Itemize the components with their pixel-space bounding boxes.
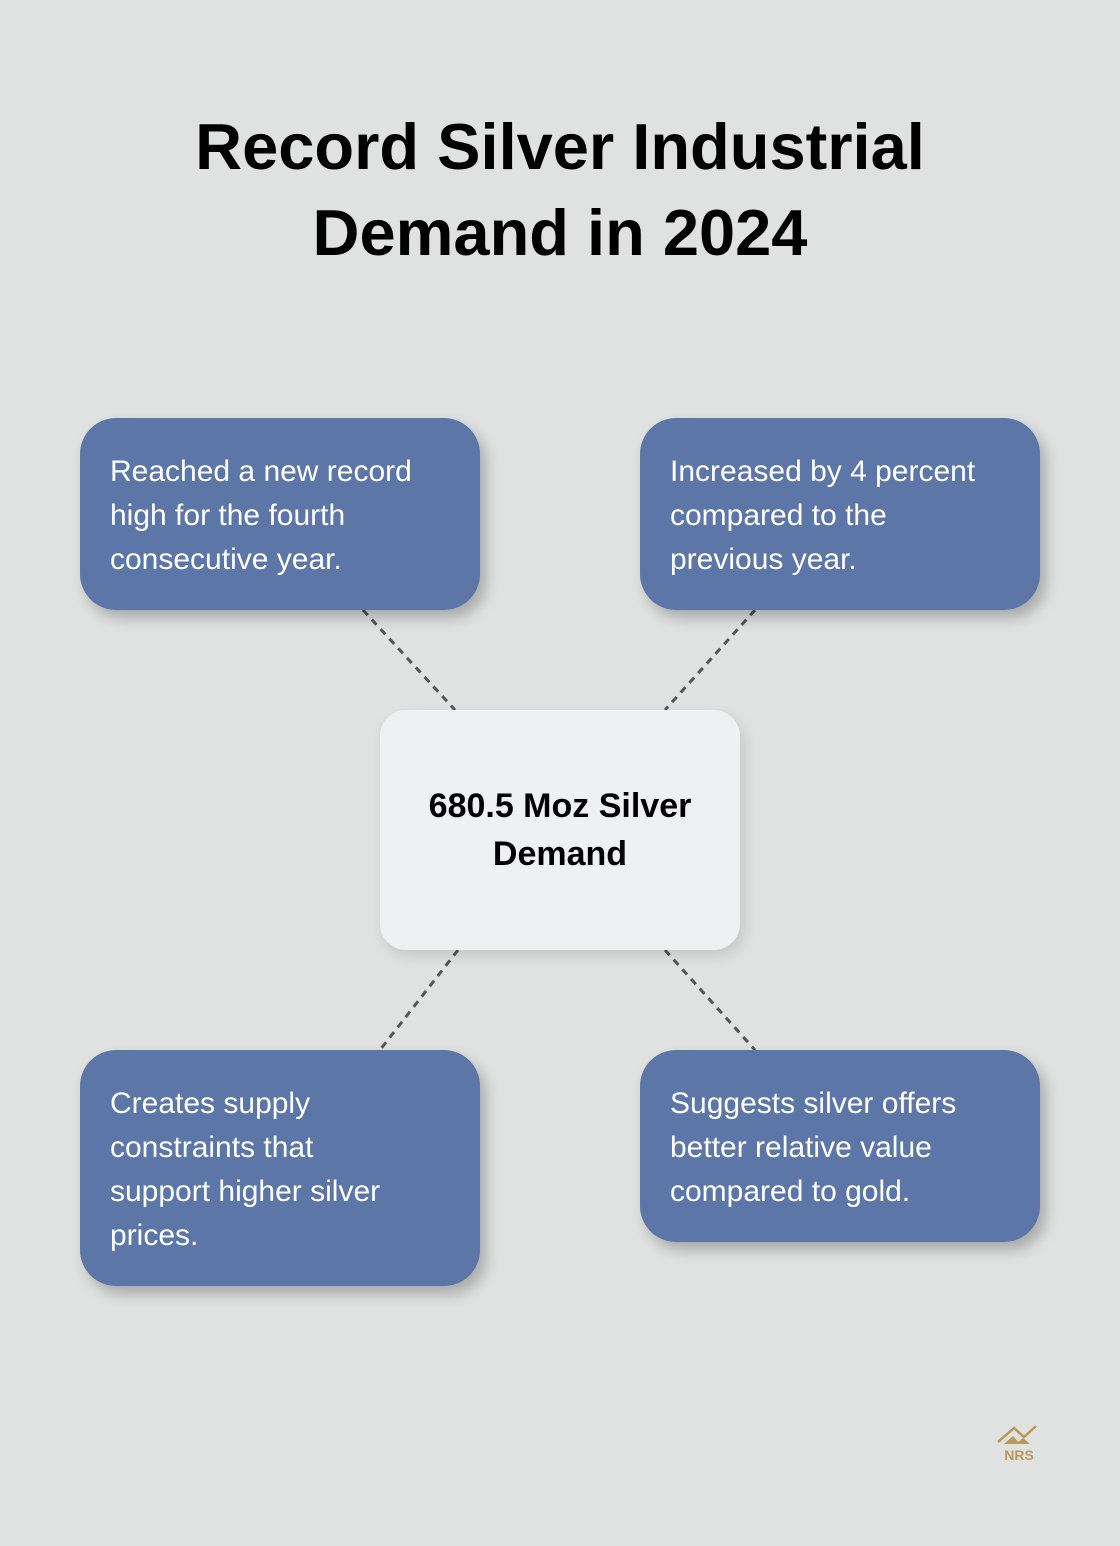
box: top left: Reached a new record bbox=[110, 455, 412, 488]
box: bottom right bbox=[640, 1050, 1040, 1242]
box: bottom left: constraints that bbox=[110, 1131, 313, 1164]
logo: NRS bbox=[1004, 1447, 1034, 1463]
box: top right bbox=[640, 418, 1040, 610]
box: top right: Increased by 4 percent bbox=[670, 455, 975, 488]
box: top right: previous year. bbox=[670, 543, 857, 576]
center box: Demand bbox=[493, 835, 627, 873]
logo bbox=[997, 1425, 1037, 1463]
center box bbox=[380, 710, 740, 950]
box: top left: high for the fourth bbox=[110, 499, 345, 532]
box: bottom left: Creates supply bbox=[110, 1087, 310, 1120]
center box: 680.5 Moz Silver bbox=[429, 787, 691, 825]
box: bottom right: compared to gold. bbox=[670, 1175, 910, 1208]
box: bottom right: better relative value bbox=[670, 1131, 932, 1164]
box: bottom right: Suggests silver offers bbox=[670, 1087, 956, 1120]
box: top right: compared to the bbox=[670, 499, 887, 532]
box: bottom left: prices. bbox=[110, 1219, 198, 1252]
box: top left: consecutive year. bbox=[110, 543, 342, 576]
box: top left bbox=[80, 418, 480, 610]
box: bottom left bbox=[80, 1050, 480, 1286]
title bbox=[195, 110, 925, 269]
box: bottom left: support higher silver bbox=[110, 1175, 380, 1208]
title: Record Silver Industrial bbox=[195, 110, 925, 183]
title: Demand in 2024 bbox=[313, 196, 807, 269]
